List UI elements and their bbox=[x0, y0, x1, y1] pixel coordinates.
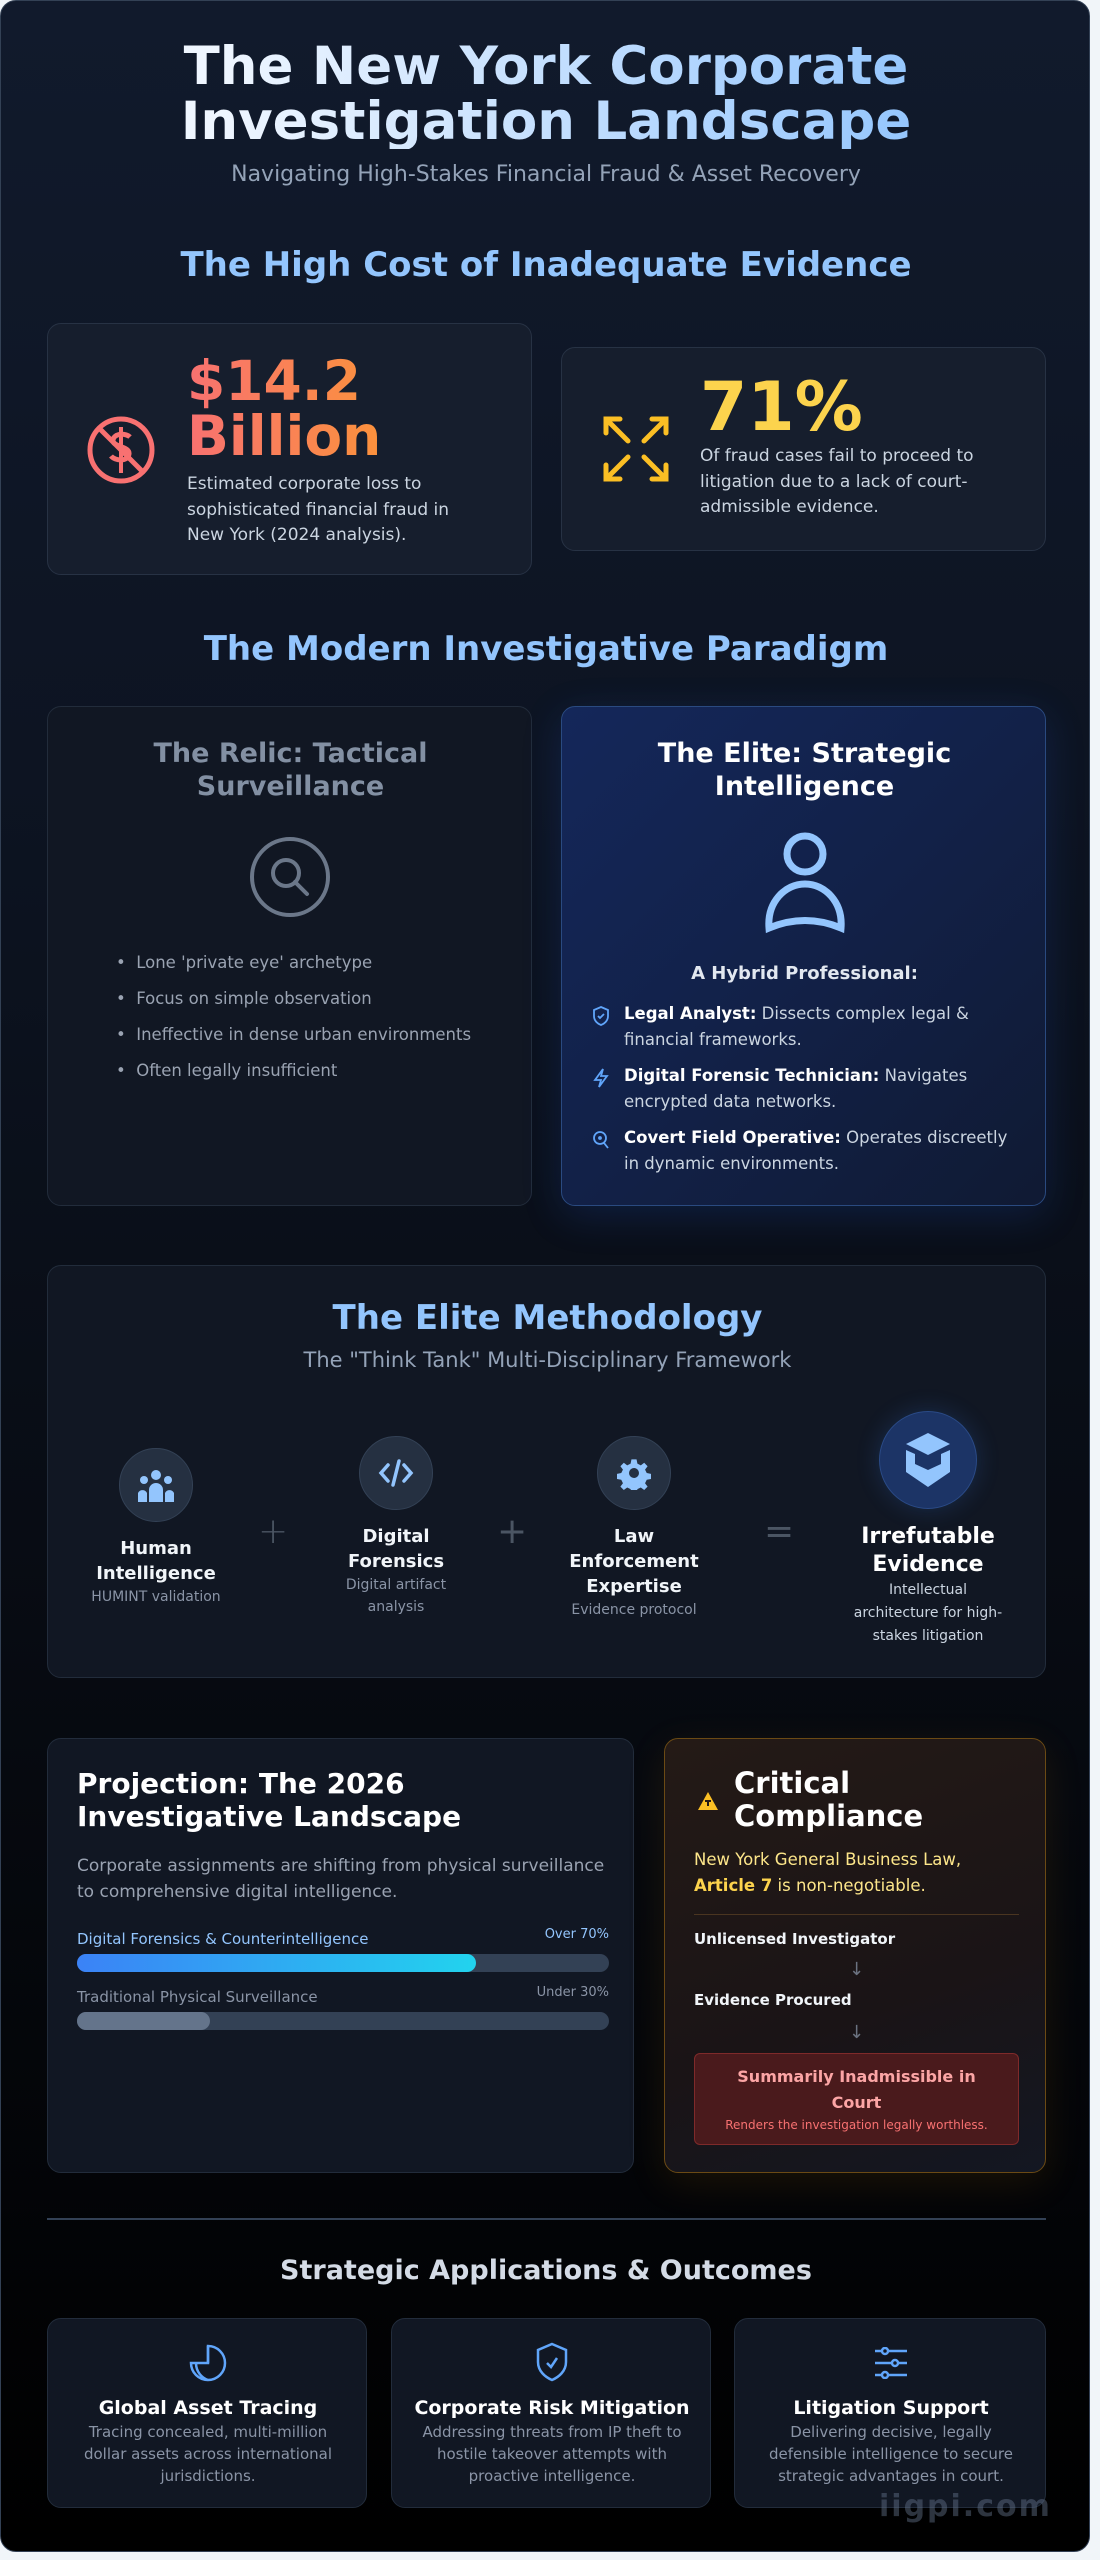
stat card: 71% bbox=[561, 347, 1046, 551]
icon: person bbox=[765, 832, 845, 934]
stat value bbox=[187, 354, 381, 464]
result: irrefutable evidence: stakes litigation bbox=[873, 1628, 983, 1644]
bar: physical surveillance: Traditional Physical Surveillance bbox=[77, 1988, 318, 2006]
panel: methodology bbox=[47, 1265, 1046, 1678]
stat description: Estimated corporate loss to sophisticated financial fraud in New York (2024 analysis). bbox=[187, 474, 449, 545]
description: Tracing concealed, multi-million dollar assets across international jurisdictions. bbox=[84, 2423, 332, 2485]
step: law enforcement: Law bbox=[614, 1526, 654, 1547]
elite title: Intelligence bbox=[715, 771, 894, 802]
relic title bbox=[154, 738, 427, 802]
title: Global Asset Tracing bbox=[99, 2397, 317, 2419]
item: digital forensic: encrypted data networks. bbox=[624, 1092, 836, 1111]
projection description: Corporate assignments are shifting from physical surveillance bbox=[77, 1856, 604, 1876]
icon: search bbox=[250, 837, 330, 917]
callout: inadmissible: Renders the investigation legally worthless. bbox=[725, 2118, 988, 2132]
title: Corporate Risk Mitigation bbox=[414, 2397, 690, 2419]
plus: + bbox=[497, 1511, 527, 1552]
compliance law text: New York General Business Law, bbox=[694, 1850, 961, 1869]
stat card: 14.2 billion bbox=[47, 323, 532, 575]
icon: no dollar bbox=[88, 416, 154, 484]
plus: + bbox=[258, 1511, 288, 1552]
result: irrefutable evidence: Evidence bbox=[872, 1552, 984, 1577]
item: legal analyst: financial frameworks. bbox=[624, 1030, 802, 1049]
arrow: ↓ bbox=[849, 2022, 864, 2043]
compliance title bbox=[734, 1766, 923, 1833]
step: digital forensics: Digital bbox=[362, 1526, 430, 1547]
step: digital forensics: Digital artifact bbox=[346, 1577, 446, 1593]
step: digital forensics: Forensics bbox=[348, 1551, 444, 1572]
flow step: evidence: Evidence Procured bbox=[694, 1991, 852, 2009]
watermark: iigpi.com bbox=[879, 2489, 1052, 2524]
stat value: $14.2 bbox=[187, 349, 361, 413]
panel: projection 2026 bbox=[47, 1738, 634, 2173]
projection title bbox=[77, 1767, 461, 1833]
relic bullet list: • Lone 'private eye' archetype bbox=[116, 953, 372, 972]
card: global asset tracing bbox=[47, 2318, 367, 2508]
result: irrefutable evidence: architecture for high- bbox=[854, 1605, 1002, 1621]
compliance title: Compliance bbox=[734, 1799, 923, 1833]
panel: critical compliance bbox=[664, 1738, 1046, 2173]
item: covert: Covert Field Operative: Operates discreetly bbox=[624, 1128, 1007, 1147]
step: human intelligence bbox=[91, 1448, 221, 1605]
step: human intelligence: Intelligence bbox=[96, 1563, 216, 1584]
relic bullet list: • Often legally insufficient bbox=[116, 1061, 337, 1080]
title: The New York Corporate bbox=[184, 36, 908, 97]
hybrid heading: A Hybrid Professional: bbox=[691, 963, 918, 984]
compliance title: Critical bbox=[734, 1766, 850, 1800]
item: digital forensic: Digital Forensic Technician: Navigates bbox=[624, 1066, 967, 1085]
item: covert: in dynamic environments. bbox=[624, 1154, 839, 1173]
stat value: 71% bbox=[700, 368, 863, 447]
callout: inadmissible: Court bbox=[832, 2093, 881, 2112]
item: legal analyst: Legal Analyst: Dissects complex legal & bbox=[624, 1004, 969, 1023]
bar: physical surveillance bbox=[76, 1985, 609, 2030]
relic title: The Relic: Tactical bbox=[154, 738, 427, 769]
panel: relic bbox=[47, 706, 532, 1206]
item: digital forensic bbox=[593, 1066, 967, 1111]
bar: physical surveillance: Under 30% bbox=[537, 1985, 609, 2000]
stat description: Of fraud cases fail to proceed to litigation due to a lack of court-admissible evidence. bbox=[700, 446, 974, 517]
step: law enforcement bbox=[569, 1436, 699, 1618]
description: Addressing threats from IP theft to hostile takeover attempts with proactive intelligence. bbox=[422, 2423, 682, 2485]
arrow: ↓ bbox=[849, 1959, 864, 1980]
result: irrefutable evidence: Intellectual bbox=[889, 1582, 967, 1598]
methodology title: The Elite Methodology bbox=[333, 1298, 762, 1338]
elite title bbox=[658, 738, 951, 802]
step: human intelligence: Human bbox=[120, 1538, 192, 1559]
bar: digital forensics bbox=[77, 1927, 609, 1972]
step: human intelligence: HUMINT validation bbox=[91, 1589, 221, 1605]
item: covert bbox=[593, 1128, 1007, 1173]
bar: digital forensics: Digital Forensics & Counterintelligence bbox=[77, 1930, 368, 1948]
callout: inadmissible bbox=[694, 2053, 1019, 2145]
step: law enforcement: Expertise bbox=[586, 1576, 682, 1597]
projection title: Investigative Landscape bbox=[77, 1800, 461, 1833]
step: digital forensics bbox=[346, 1436, 446, 1615]
flow step: unlicensed: Unlicensed Investigator bbox=[694, 1930, 895, 1948]
relic bullet list bbox=[116, 953, 471, 1080]
divider bbox=[694, 1914, 1019, 1915]
step: digital forensics: analysis bbox=[368, 1599, 424, 1615]
result: irrefutable evidence bbox=[854, 1404, 1002, 1644]
stat value: Billion bbox=[187, 404, 381, 468]
bar: digital forensics: Over 70% bbox=[545, 1927, 609, 1942]
relic bullet list: • Ineffective in dense urban environments bbox=[116, 1025, 471, 1044]
description: Delivering decisive, legally defensible intelligence to secure strategic advantages in court. bbox=[769, 2423, 1013, 2485]
compliance law text: Article 7 is non-negotiable. bbox=[694, 1876, 926, 1895]
icon: globe bbox=[190, 2344, 226, 2382]
title: Investigation Landscape bbox=[181, 91, 911, 152]
icon: expand arrows bbox=[604, 416, 668, 482]
heading: high cost: The High Cost of Inadequate Evidence bbox=[180, 245, 912, 285]
icon: warning bbox=[698, 1792, 718, 1810]
divider bbox=[47, 2218, 1046, 2220]
icon: sliders bbox=[875, 2347, 907, 2379]
step: law enforcement: Enforcement bbox=[569, 1551, 699, 1572]
subtitle: Navigating High-Stakes Financial Fraud & Asset Recovery bbox=[231, 162, 861, 187]
heading: modern paradigm: The Modern Investigative Paradigm bbox=[204, 629, 888, 669]
projection description bbox=[77, 1856, 604, 1902]
bar chart bbox=[76, 1927, 609, 2030]
elite list bbox=[593, 1004, 1007, 1173]
projection description: to comprehensive digital intelligence. bbox=[77, 1882, 397, 1902]
title bbox=[1, 39, 1091, 149]
icon: shield bbox=[536, 2342, 568, 2382]
result: irrefutable evidence: Irrefutable bbox=[861, 1524, 995, 1549]
equals: = bbox=[764, 1511, 794, 1552]
heading: strategic applications: Strategic Applications & Outcomes bbox=[280, 2255, 812, 2286]
step: law enforcement: Evidence protocol bbox=[571, 1602, 697, 1618]
projection title: Projection: The 2026 bbox=[77, 1767, 405, 1800]
compliance law text bbox=[694, 1850, 961, 1895]
methodology subtitle: The "Think Tank" Multi-Disciplinary Framework bbox=[304, 1348, 791, 1372]
item: legal analyst bbox=[593, 1004, 969, 1049]
card: litigation support bbox=[734, 2318, 1046, 2508]
relic title: Surveillance bbox=[197, 771, 384, 802]
card: corporate risk mitigation bbox=[391, 2318, 711, 2508]
title: Litigation Support bbox=[793, 2397, 989, 2419]
callout: inadmissible: Summarily Inadmissible in bbox=[737, 2067, 976, 2086]
panel: elite bbox=[561, 706, 1046, 1206]
relic bullet list: • Focus on simple observation bbox=[116, 989, 372, 1008]
elite title: The Elite: Strategic bbox=[658, 738, 951, 769]
